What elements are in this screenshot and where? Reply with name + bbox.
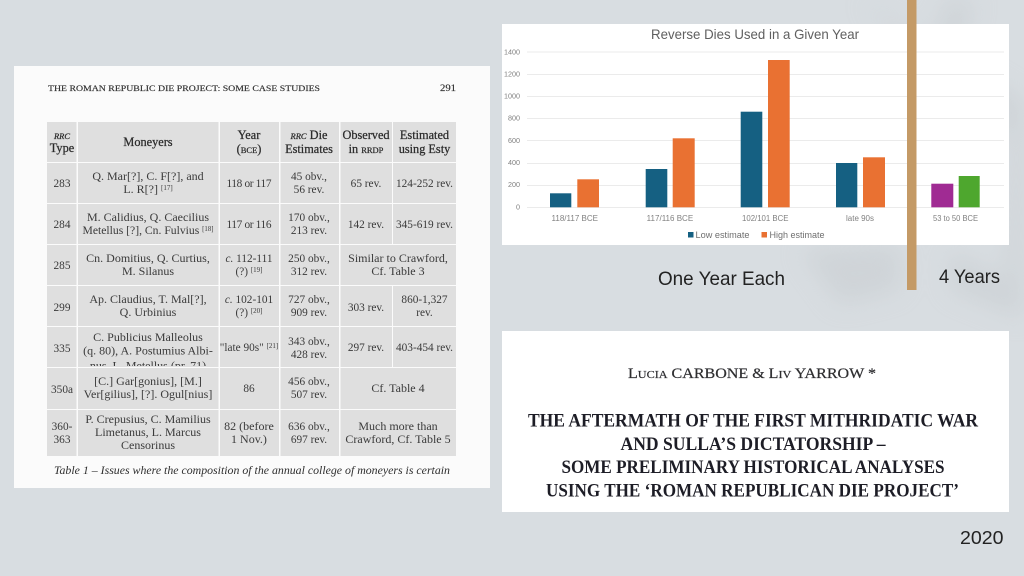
page header: 291 bbox=[440, 84, 456, 94]
table row 284: 170 obv., bbox=[288, 212, 330, 224]
table row 335: [21] bbox=[267, 342, 278, 350]
article heading: USING THE ‘ROMAN REPUBLICAN DIE PROJECT’ bbox=[546, 482, 959, 502]
x axis labels: late 90s bbox=[846, 214, 874, 223]
panel: bar chart bbox=[502, 24, 1009, 245]
table row 360-363: 1 Nov.) bbox=[231, 432, 267, 446]
y axis labels bbox=[504, 48, 520, 212]
table row 285: c. 112-111 bbox=[225, 253, 273, 265]
y axis labels: 1400 bbox=[504, 48, 520, 56]
divider bar bbox=[907, 0, 916, 290]
table header row: (BCE) bbox=[237, 142, 261, 156]
table row 284: 345-619 rev. bbox=[396, 219, 453, 231]
y axis labels: 1000 bbox=[504, 92, 520, 100]
table row 360-363: Crawford, Cf. Table 5 bbox=[345, 432, 451, 446]
table row 299: Q. Urbinius bbox=[120, 305, 177, 319]
article heading: THE AFTERMATH OF THE FIRST MITHRIDATIC WAR bbox=[528, 412, 979, 432]
panel: table page bbox=[14, 66, 490, 488]
table row 283: Q. Mar[?], C. F[?], and bbox=[92, 169, 204, 183]
x axis labels: 118/117 BCE bbox=[552, 214, 598, 223]
bars: low estimate bbox=[550, 112, 857, 207]
y axis labels: 600 bbox=[508, 136, 520, 145]
page header bbox=[48, 83, 456, 94]
table row 350a: [C.] Gar[gonius], [M.] bbox=[94, 374, 202, 388]
table row 360-363: Censorinus bbox=[121, 438, 175, 452]
table row 350a: Ver[gilius], [?]. Ogul[nius] bbox=[84, 387, 212, 401]
table header row: RRC Die bbox=[290, 128, 328, 142]
table row 285 bbox=[54, 251, 448, 278]
label: year 2020: 2020 bbox=[960, 528, 1004, 548]
article heading: SOME PRELIMINARY HISTORICAL ANALYSES bbox=[562, 458, 944, 478]
table row 335: 297 rev. bbox=[348, 342, 384, 354]
table cell backgrounds bbox=[47, 122, 456, 456]
table row 283: 56 rev. bbox=[294, 184, 324, 196]
chart gridlines bbox=[527, 52, 1004, 208]
y axis labels: 800 bbox=[508, 114, 520, 122]
table row 299: Ap. Claudius, T. Mal[?], bbox=[89, 292, 207, 306]
table row 360-363 bbox=[52, 412, 451, 452]
article heading: AND SULLA’S DICTATORSHIP – bbox=[620, 435, 886, 455]
table row 283 bbox=[54, 169, 453, 196]
table row 284: 284 bbox=[54, 219, 71, 231]
x axis labels: 117/116 BCE bbox=[647, 214, 693, 223]
table header row: Type bbox=[50, 141, 75, 155]
table header row: Estimated bbox=[400, 128, 449, 142]
table row 299: 727 obv., bbox=[288, 294, 330, 306]
table caption: Table 1 – Issues where the composition of the annual college of moneyers is certain bbox=[54, 465, 450, 477]
table header row: Observed bbox=[342, 128, 390, 142]
table row 285: 312 rev. bbox=[291, 266, 327, 278]
table row 299: 909 rev. bbox=[291, 307, 327, 319]
table row 299: 860-1,327 bbox=[401, 294, 448, 306]
table row 360-363: Much more than bbox=[358, 419, 438, 433]
table row 283: 45 obv., bbox=[291, 171, 327, 183]
table row 284: [18] bbox=[202, 225, 213, 233]
table row 299: 303 rev. bbox=[348, 302, 384, 314]
table row 284 bbox=[54, 210, 453, 237]
table header row: Moneyers bbox=[123, 135, 173, 149]
y axis labels: 0 bbox=[516, 202, 520, 212]
chart legend bbox=[688, 230, 824, 240]
table row 299: [20] bbox=[251, 307, 263, 315]
table row 350a: 456 obv., bbox=[288, 376, 330, 388]
table row 299: rev. bbox=[416, 307, 433, 319]
label: one year each: One Year Each bbox=[658, 268, 785, 290]
table row 360-363: 360- bbox=[52, 421, 73, 433]
table row 285: [19] bbox=[251, 266, 263, 274]
table row 299: c. 102-101 bbox=[225, 294, 273, 306]
y axis labels: 400 bbox=[508, 158, 520, 167]
table header row: using Esty bbox=[399, 142, 451, 156]
page header: THE ROMAN REPUBLIC DIE PROJECT: SOME CASE STUDIES bbox=[48, 83, 320, 93]
bars: high estimate bbox=[577, 60, 885, 207]
table row 335 bbox=[54, 333, 452, 366]
table row 335: 428 rev. bbox=[291, 349, 327, 361]
chart legend: Low estimate bbox=[696, 230, 750, 240]
table row 360-363: 363 bbox=[54, 434, 71, 446]
table row 284: M. Calidius, Q. Caecilius bbox=[87, 210, 209, 224]
table row 335: "late 90s" bbox=[220, 342, 264, 354]
table row 350a: 86 bbox=[243, 383, 255, 395]
table row 350a bbox=[51, 374, 425, 401]
table row 283: 283 bbox=[54, 178, 71, 190]
table row 285: M. Silanus bbox=[122, 264, 174, 278]
table header row bbox=[50, 128, 451, 156]
bar: 53 to 50 BCE second estimate bbox=[959, 176, 980, 207]
table row 284: Metellus [?], Cn. Fulvius bbox=[82, 223, 203, 237]
y axis labels: 200 bbox=[508, 180, 520, 189]
label: 4 years: 4 Years bbox=[939, 266, 1000, 288]
panel: article title bbox=[502, 331, 1009, 512]
bar: 53 to 50 BCE first estimate bbox=[931, 184, 953, 207]
table row 285: Cn. Domitius, Q. Curtius, bbox=[86, 251, 210, 265]
table row 283: L. R[?] bbox=[123, 182, 158, 196]
x axis labels: 53 to 50 BCE bbox=[933, 214, 978, 223]
table row 285: 285 bbox=[54, 260, 71, 272]
table row 360-363: Limetanus, L. Marcus bbox=[95, 425, 201, 439]
table row 285: Cf. Table 3 bbox=[371, 264, 425, 278]
table row 285: Similar to Crawford, bbox=[348, 251, 448, 265]
table header row: in RRDP bbox=[349, 142, 384, 156]
table row 335: C. Publicius Malleolus bbox=[93, 330, 203, 344]
table row 283: 118 or 117 bbox=[226, 178, 272, 190]
table row 283: [17] bbox=[161, 184, 173, 192]
table row 284: 142 rev. bbox=[348, 219, 384, 231]
table row 284: 117 or 116 bbox=[226, 219, 272, 231]
chart title: Reverse Dies Used in a Given Year bbox=[651, 26, 859, 42]
table header row: RRC bbox=[53, 131, 70, 141]
x axis labels: 102/101 BCE bbox=[742, 214, 788, 223]
article heading bbox=[528, 412, 979, 502]
table row 335: 403-454 rev. bbox=[396, 342, 453, 354]
table row 299: 299 bbox=[54, 302, 71, 314]
table row 360-363: 82 (before bbox=[224, 419, 274, 433]
table row 350a: 350a bbox=[51, 384, 73, 396]
table row 335: 335 bbox=[54, 343, 71, 355]
table row 285: 250 obv., bbox=[288, 253, 330, 265]
table row 350a: Cf. Table 4 bbox=[371, 381, 425, 395]
table row 284: 213 rev. bbox=[291, 225, 327, 237]
y axis labels: 1200 bbox=[504, 70, 520, 78]
x axis labels bbox=[552, 214, 978, 223]
table row 360-363: P. Crepusius, C. Mamilius bbox=[85, 412, 211, 426]
table row 283: 65 rev. bbox=[351, 178, 381, 190]
table header row: Estimates bbox=[285, 142, 333, 156]
table row 360-363: 636 obv., bbox=[288, 421, 330, 433]
chart legend: High estimate bbox=[770, 230, 824, 240]
table header row: Year bbox=[238, 128, 260, 142]
table row 299 bbox=[54, 292, 448, 319]
table row 360-363: 697 rev. bbox=[291, 434, 327, 446]
table row 285: (?) bbox=[235, 266, 248, 278]
authors: LUCIA CARBONE & L IV YARROW * bbox=[628, 366, 876, 382]
table row 335: nus, L. Metellus (pr. 71) bbox=[90, 358, 206, 372]
table row 335: 343 obv., bbox=[288, 336, 330, 348]
table row 283: 124-252 rev. bbox=[396, 178, 453, 190]
table row 299: (?) bbox=[235, 307, 248, 319]
table row 350a: 507 rev. bbox=[291, 389, 327, 401]
table row 335: (q. 80), A. Postumius Albi- bbox=[83, 344, 213, 358]
